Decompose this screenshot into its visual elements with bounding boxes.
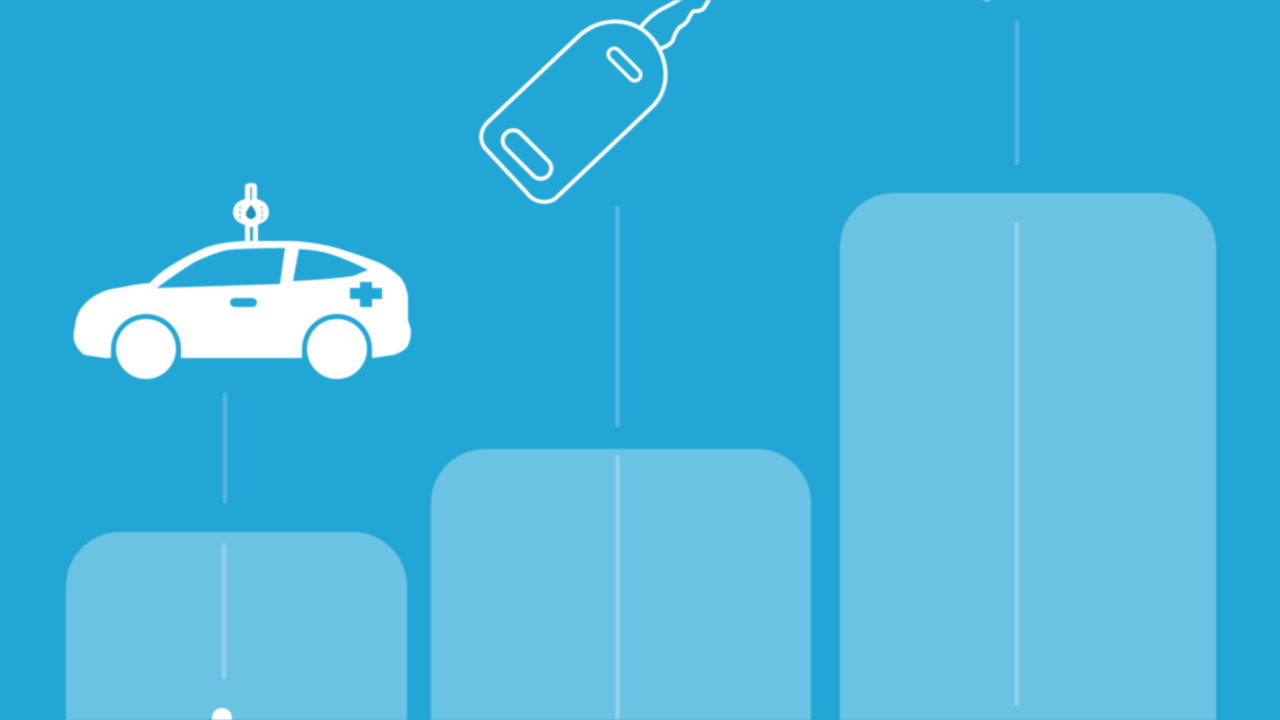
- connector lines: [224, 23, 1017, 720]
- bar 2: [431, 449, 811, 720]
- key fob outline: [481, 22, 666, 202]
- car antenna figure: [233, 183, 269, 243]
- icon: car key: [481, 0, 710, 202]
- key blade: [641, 0, 710, 48]
- car rear wheel arch and wheel: [111, 314, 181, 379]
- car rear window: [293, 249, 368, 281]
- progress dot: [212, 708, 232, 720]
- car door handle: [230, 298, 257, 307]
- bar 3: [840, 193, 1216, 720]
- car front window: [157, 248, 285, 288]
- bar 1: [66, 532, 407, 720]
- fob small slot: [606, 46, 643, 83]
- car cross mark: [350, 282, 382, 307]
- icon: car: [74, 183, 411, 379]
- fob large slot: [498, 126, 556, 183]
- car body: [74, 241, 411, 358]
- car front wheel arch and wheel: [302, 314, 372, 379]
- top edge fragment: [983, 0, 991, 2]
